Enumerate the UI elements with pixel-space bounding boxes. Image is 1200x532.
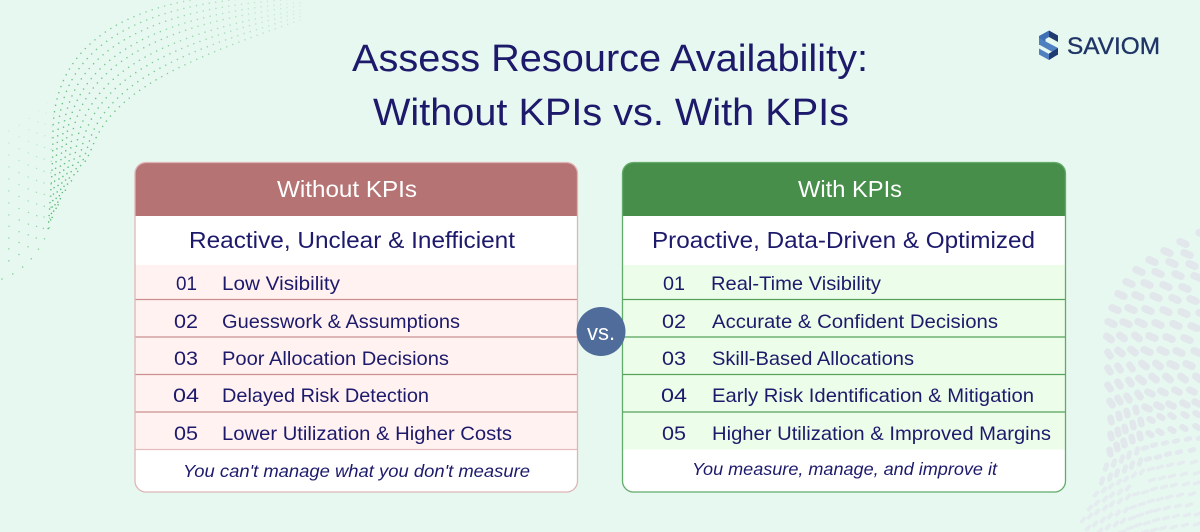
title bbox=[352, 38, 868, 134]
panel header: without KPIs: Without KPIs bbox=[277, 176, 417, 202]
vs badge: vs. bbox=[587, 320, 615, 345]
panel body bbox=[622, 162, 1066, 492]
decorative gray dot sphere, right bbox=[1082, 233, 1200, 532]
subheading: Proactive, Data-Driven & Optimized bbox=[652, 227, 1035, 253]
panel: without KPIs bbox=[135, 162, 578, 492]
row 04: 04 bbox=[661, 385, 687, 407]
row 01: Low Visibility bbox=[222, 273, 340, 295]
row 05: Lower Utilization & Higher Costs bbox=[222, 423, 512, 445]
row 01 bbox=[176, 273, 340, 295]
row 02: 02 bbox=[662, 311, 686, 333]
row 01: 01 bbox=[663, 273, 685, 295]
panel header: with KPIs bbox=[622, 162, 1066, 216]
row 03: Skill-Based Allocations bbox=[712, 348, 914, 370]
decorative dotted wave, top left bbox=[0, 0, 300, 279]
row 05: Higher Utilization & Improved Margins bbox=[712, 423, 1051, 445]
panel body bbox=[135, 162, 578, 492]
footer note: You measure, manage, and improve it bbox=[692, 459, 998, 479]
row 04: 04 bbox=[173, 385, 199, 407]
row 02: Accurate & Confident Decisions bbox=[712, 311, 998, 333]
rows background bbox=[136, 265, 577, 450]
vs badge bbox=[576, 307, 626, 356]
rows background bbox=[623, 265, 1065, 450]
row 04: Early Risk Identification & Mitigation bbox=[712, 385, 1034, 407]
row 04: Delayed Risk Detection bbox=[222, 385, 429, 407]
subheading: Reactive, Unclear & Inefficient bbox=[189, 227, 515, 253]
footer note: You can't manage what you don't measure bbox=[183, 461, 530, 481]
row 03: 03 bbox=[174, 348, 198, 370]
title: Without KPIs vs. With KPIs bbox=[373, 92, 849, 134]
row 03: Poor Allocation Decisions bbox=[222, 348, 449, 370]
logo: Saviom bbox=[1039, 30, 1160, 60]
panel header: without KPIs bbox=[135, 162, 578, 216]
row 03: 03 bbox=[662, 348, 686, 370]
icon: Saviom S cube bbox=[1039, 30, 1058, 60]
title: Assess Resource Availability: bbox=[352, 38, 868, 80]
panel border bbox=[622, 162, 1066, 492]
row 02: 02 bbox=[174, 311, 198, 333]
row 05: 05 bbox=[662, 423, 686, 445]
panel header: with KPIs: With KPIs bbox=[798, 176, 902, 202]
row 01: 01 bbox=[176, 273, 197, 295]
panel border bbox=[135, 162, 578, 492]
panel: with KPIs bbox=[622, 162, 1066, 492]
row 05: 05 bbox=[174, 423, 198, 445]
wordmark: SAVIOM bbox=[1067, 33, 1160, 60]
row 02: Guesswork & Assumptions bbox=[222, 311, 460, 333]
row 01: Real-Time Visibility bbox=[711, 273, 881, 295]
